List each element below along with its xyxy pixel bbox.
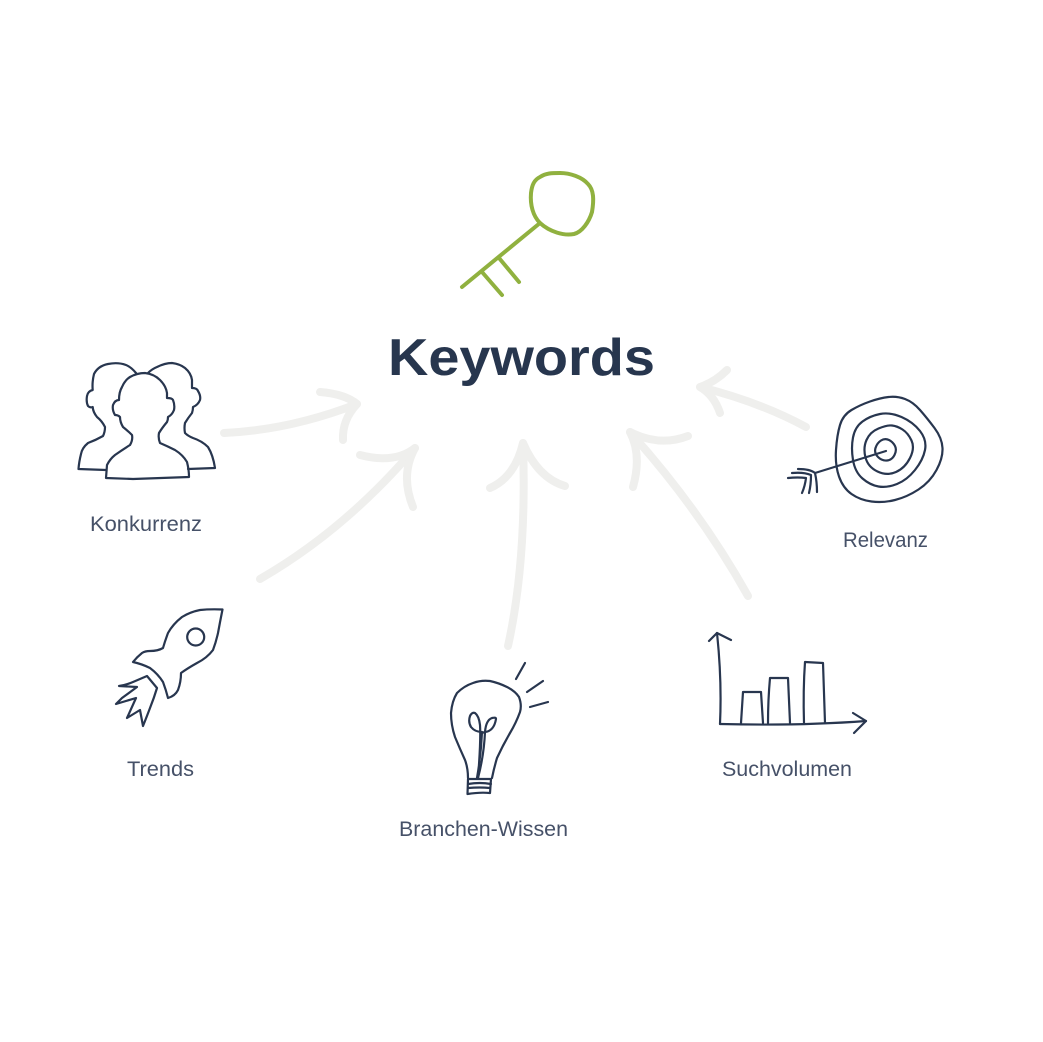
arrow: Suchvolumen to Keywords (630, 432, 748, 596)
label: Suchvolumen: Suchvolumen (722, 758, 852, 781)
arrow: Trends to Keywords (260, 448, 415, 579)
label: Relevanz: Relevanz (843, 529, 928, 552)
arrow: Konkurrenz to Keywords (224, 392, 357, 440)
panel: Trends (116, 609, 222, 781)
icon: light bulb (451, 663, 548, 794)
panel: Suchvolumen (709, 633, 866, 781)
title: Keywords (388, 329, 655, 387)
label: Konkurrenz: Konkurrenz (90, 513, 202, 536)
arrow: Relevanz to Keywords (700, 370, 806, 427)
panel: Branchen-Wissen (399, 663, 568, 841)
panel: Relevanz (788, 397, 943, 552)
icon: group of people (78, 363, 215, 479)
icon: bar chart (709, 633, 866, 733)
icon: green key (462, 173, 593, 295)
label: Trends: Trends (127, 758, 194, 781)
icon: target with arrow (788, 397, 943, 502)
arrow: Branchen-Wissen to Keywords (490, 443, 565, 646)
icon: rocket (116, 609, 222, 726)
label: Branchen-Wissen: Branchen-Wissen (399, 818, 568, 841)
panel: Konkurrenz (78, 363, 215, 536)
